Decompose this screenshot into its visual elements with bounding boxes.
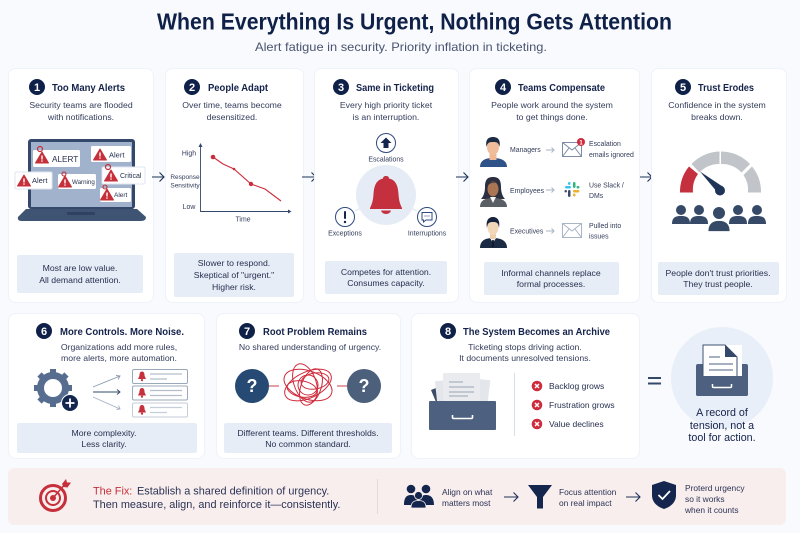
takeaway 1: Most are low value. [43, 263, 117, 273]
arrow 2 to 3 [302, 172, 316, 182]
icon: laptop with alerts [15, 139, 146, 221]
diagram: question marks joined by tangle [235, 360, 381, 408]
badge 1: 1 [34, 82, 40, 94]
result caption: tension, not a [690, 420, 754, 432]
heading 3: Same in Ticketing [356, 82, 434, 94]
description 8: It documents unresolved tensions. [459, 353, 591, 363]
result caption: tool for action. [688, 432, 756, 444]
panel 4: teams compensate [470, 68, 640, 302]
panel 7: root problem [216, 314, 400, 458]
description 1: with notifications. [47, 112, 114, 122]
badge 5: 5 [680, 82, 686, 94]
step: align [404, 485, 493, 508]
badge 7 [239, 323, 255, 339]
takeaway 2: Slower to respond. [198, 258, 270, 268]
row: executives: Executives [510, 228, 544, 236]
heading 2: People Adapt [208, 82, 268, 94]
takeaway 3: Competes for attention. [341, 267, 431, 277]
row: employees: Use Slack / [589, 182, 624, 190]
step: focus [528, 485, 617, 508]
line chart: response sensitivity over time: Low [183, 204, 195, 211]
takeaway 2 [174, 253, 294, 297]
takeaway 6: More complexity. [71, 428, 137, 438]
icon: central bell with interruption sources: Escalations [368, 156, 404, 164]
takeaway 6: Less clarity. [81, 439, 127, 449]
equals sign [648, 378, 661, 384]
takeaway 2: Skeptical of "urgent." [194, 270, 274, 280]
divider [514, 373, 516, 436]
icon: laptop with alerts: Alert [32, 176, 48, 185]
banner: the fix [8, 468, 786, 525]
diagram: question marks joined by tangle: ? [246, 376, 258, 396]
takeaway 7 [224, 423, 392, 453]
badge 3 [333, 79, 349, 95]
description 7: No shared understanding of urgency. [239, 342, 381, 352]
heading 1: Too Many Alerts [52, 82, 125, 94]
takeaway 3: Consumes capacity. [347, 278, 425, 288]
panel 6: more controls [8, 314, 204, 458]
badge 8: 8 [445, 326, 451, 338]
step: protect: so it works [685, 494, 725, 504]
arrows fanning out [93, 376, 120, 410]
line chart: response sensitivity over time: Response [170, 174, 200, 181]
row: executives [480, 217, 621, 248]
icon: archive drawer [429, 373, 496, 430]
heading 4: Teams Compensate [518, 82, 605, 94]
description 5: breaks down. [691, 112, 743, 122]
step: align: Align on what [442, 487, 493, 497]
subtitle: Alert fatigue in security. Priority inflation in ticketing. [255, 40, 547, 54]
list of consequences: Value declines [549, 419, 604, 429]
takeaway 1: All demand attention. [39, 275, 121, 285]
takeaway 2: Higher risk. [212, 282, 256, 292]
takeaway 4: Informal channels replace [501, 268, 601, 278]
panel 5: trust erodes [652, 68, 786, 302]
heading 6: More Controls. More Noise. [60, 326, 184, 338]
step: align: matters most [442, 498, 491, 508]
icon: central bell with interruption sources [328, 134, 447, 238]
list of consequences: Backlog grows [549, 381, 604, 391]
description 2: desensitized. [207, 112, 257, 122]
step: focus: Focus attention [559, 487, 617, 497]
row: managers [480, 137, 634, 167]
step: protect [652, 481, 745, 515]
step: protect: when it counts [684, 505, 739, 515]
step: focus: on real impact [559, 498, 612, 508]
takeaway 4 [484, 262, 619, 295]
takeaway 4: formal processes. [517, 279, 585, 289]
description 6: Organizations add more rules, [61, 342, 177, 352]
fix statement: Establish a shared definition of urgency. [137, 486, 329, 498]
heading 8: The System Becomes an Archive [463, 326, 610, 338]
arrow 3 to 4 [456, 172, 468, 182]
badge 6 [36, 323, 52, 339]
arrow [504, 492, 518, 502]
badge 4: 4 [500, 82, 507, 94]
row: employees [480, 177, 624, 207]
icon: central bell with interruption sources: Interruptions [408, 230, 447, 238]
takeaway 7: Different teams. Different thresholds. [237, 428, 379, 438]
description 2: Over time, teams become [182, 100, 282, 110]
fix statement: Then measure, align, and reinforce it—consistently. [93, 499, 340, 511]
takeaway 5: People don't trust priorities. [666, 268, 770, 278]
arrow 1 to 2 [152, 172, 164, 182]
takeaway 1 [17, 255, 143, 293]
step: protect: Proterd urgency [685, 483, 745, 493]
divider [376, 479, 378, 514]
panel 1: too many alerts [8, 68, 154, 302]
takeaway 3 [325, 261, 447, 294]
badge 6: 6 [41, 326, 47, 338]
badge 5 [675, 79, 691, 95]
panel 2: people adapt [166, 68, 304, 302]
icon: group of people [672, 205, 766, 232]
badge 2: 2 [189, 82, 195, 94]
description 4: People work around the system [491, 100, 613, 110]
heading 7: Root Problem Remains [263, 326, 367, 338]
arrow [626, 492, 640, 502]
icon: laptop with alerts: Alert [114, 192, 128, 199]
title: When Everything Is Urgent, Nothing Gets Attention [157, 8, 672, 34]
icon: target [40, 479, 71, 510]
icon: laptop with alerts: Warning [72, 179, 95, 186]
badge 7: 7 [244, 326, 250, 338]
badge 2 [184, 79, 200, 95]
description 6: more alerts, more automation. [61, 353, 177, 363]
badge 4 [495, 79, 511, 95]
takeaway 5: They trust people. [683, 279, 753, 289]
badge 1 [29, 79, 45, 95]
line chart: response sensitivity over time [170, 143, 292, 224]
description 8: Ticketing stops driving action. [468, 342, 582, 352]
row: executives: issues [589, 234, 609, 240]
list of consequences: Frustration grows [549, 400, 615, 410]
row: managers: Escalation [589, 141, 621, 148]
row: employees: DMs [589, 193, 604, 200]
row: managers: Managers [510, 147, 541, 154]
takeaway 6 [17, 423, 197, 453]
description 4: to get things done. [516, 112, 588, 122]
result: record of tension [671, 327, 773, 444]
row: managers: 1 [579, 140, 583, 146]
list of consequences [532, 381, 615, 429]
line chart: response sensitivity over time: Time [235, 216, 251, 224]
icon: gear with plus [34, 369, 78, 412]
takeaway 5 [658, 262, 779, 295]
icon: trust gauge [680, 152, 761, 196]
icon: laptop with alerts: ALERT [52, 155, 78, 164]
line chart: response sensitivity over time: Sensitivity [170, 182, 200, 190]
line chart: response sensitivity over time: High [182, 150, 196, 158]
diagram: question marks joined by tangle: ? [358, 376, 370, 396]
alert cards stack [132, 370, 188, 417]
arrow 4 to 5 [640, 172, 652, 182]
row: executives: Pulled into [589, 223, 621, 230]
heading 5: Trust Erodes [698, 82, 754, 94]
result caption: A record of [696, 407, 748, 419]
row: managers: emails ignored [589, 152, 634, 159]
panel 8: system becomes archive [412, 314, 640, 458]
takeaway 7: No common standard. [265, 439, 351, 449]
description 5: Confidence in the system [668, 100, 766, 110]
fix statement: The Fix: [93, 486, 132, 498]
panel 3: same in ticketing [314, 68, 458, 302]
icon: document in tray [696, 345, 748, 396]
description 3: Every high priority ticket [340, 100, 433, 110]
badge 3: 3 [338, 82, 344, 94]
badge 8 [440, 323, 456, 339]
description 1: Security teams are flooded [29, 100, 133, 110]
row: employees: Employees [510, 188, 545, 195]
icon: central bell with interruption sources: Exceptions [328, 230, 362, 238]
icon: laptop with alerts: Critical [120, 173, 142, 180]
icon: laptop with alerts: Alert [109, 150, 125, 160]
description 3: is an interruption. [353, 112, 419, 122]
